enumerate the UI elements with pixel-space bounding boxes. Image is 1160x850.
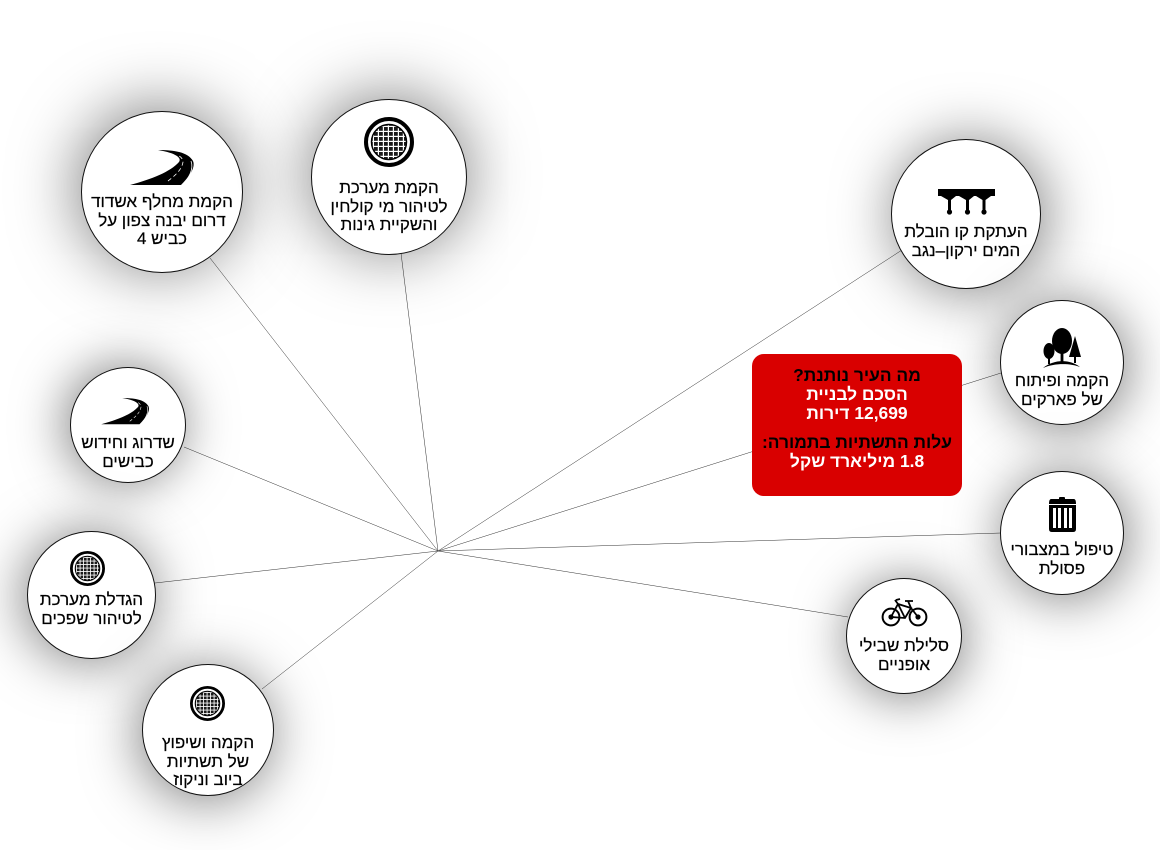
label: bike paths: אופניים	[878, 654, 930, 674]
label: water line: המים ירקון–נגב	[912, 240, 1020, 260]
label: sewage: הגדלת מערכת	[40, 590, 143, 609]
circle: drainage	[142, 664, 274, 796]
label: road upgrades	[81, 433, 175, 470]
circle: water line	[891, 139, 1041, 289]
label: cooling water: הקמת מערכת	[339, 178, 439, 197]
label: drainage: הקמה ושיפוץ	[162, 733, 254, 752]
label: interchange: דרום יבנה צפון על	[98, 210, 226, 230]
circle: interchange	[81, 111, 243, 273]
icon: manhole	[364, 117, 414, 167]
label: interchange	[91, 192, 233, 248]
label: waste	[1011, 540, 1113, 578]
callout: units: הסכם לבניית	[806, 384, 908, 404]
label: interchange: הקמת מחלף אשדוד	[91, 192, 233, 211]
icon: road	[101, 398, 149, 424]
label: parks: הקמה ופיתוח	[1015, 371, 1109, 390]
callout: units: 12,699 דירות	[806, 402, 908, 422]
label: parks: של פארקים	[1021, 390, 1103, 408]
label: interchange: כביש 4	[137, 229, 187, 248]
label: water line	[904, 222, 1028, 260]
label: drainage: ביוב וניקוז	[173, 770, 243, 789]
circle: sewage	[27, 531, 156, 659]
label: sewage	[40, 590, 143, 628]
label: waste: טיפול במצבורי	[1011, 540, 1113, 559]
label: cooling water: והשקיית גינות	[340, 215, 437, 234]
label: drainage	[162, 733, 254, 789]
label: sewage: לטיהור שפכים	[41, 608, 142, 628]
label: cooling water: לטיהור מי קולחין	[330, 196, 448, 216]
icon: bicycle	[882, 598, 928, 626]
label: cooling water	[330, 178, 448, 234]
icon: trees	[1043, 328, 1081, 368]
label: water line: העתקת קו הובלת	[904, 222, 1028, 241]
circle: parks	[1000, 300, 1124, 425]
callout: units	[806, 384, 908, 422]
icon: trash bin	[1049, 497, 1076, 532]
label: bike paths: סלילת שבילי	[859, 636, 949, 655]
label: parks	[1015, 371, 1109, 408]
circle: bike paths	[846, 578, 962, 694]
callout: cost: 1.8 מיליארד שקל	[790, 451, 924, 471]
label: bike paths	[859, 636, 949, 674]
callout heading: מה העיר נותנת?	[793, 365, 921, 385]
label: road upgrades: שדרוג וחידוש	[81, 433, 175, 452]
icon: manhole	[70, 551, 105, 586]
callout subheading: עלות התשתיות בתמורה:	[762, 432, 952, 452]
circle: road upgrades	[70, 367, 186, 483]
label: road upgrades: כבישים	[102, 452, 154, 470]
circle: waste	[1000, 471, 1124, 595]
icon: bridge	[938, 189, 995, 215]
circle: cooling water	[311, 99, 467, 255]
icon: manhole	[190, 686, 225, 721]
icon: road	[130, 150, 194, 185]
label: waste: פסולת	[1039, 558, 1085, 578]
callout: what the city gives	[752, 354, 962, 496]
label: drainage: של תשתיות	[167, 752, 249, 770]
